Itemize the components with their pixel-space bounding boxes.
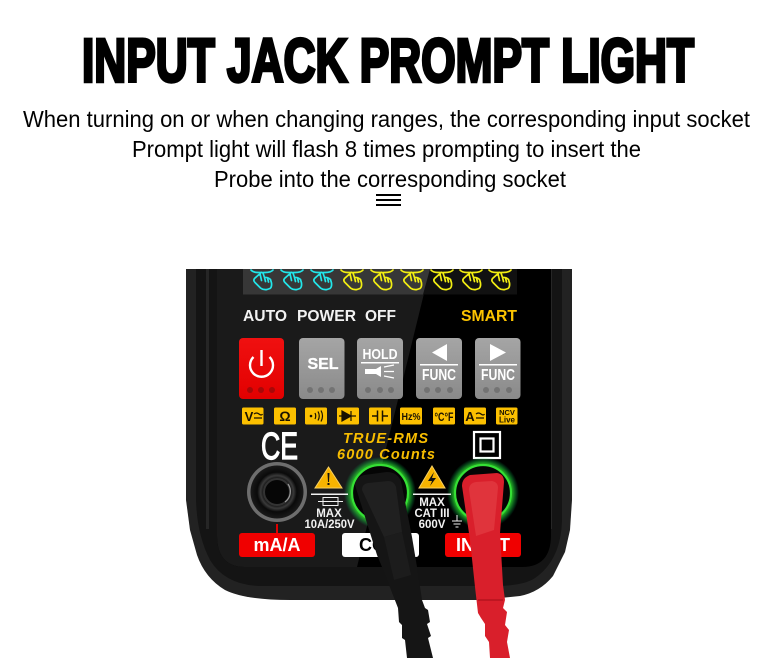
function icon row: Live	[499, 416, 516, 424]
red probe	[462, 473, 510, 658]
CAT III rating: CAT III	[414, 508, 450, 520]
COM label	[342, 533, 419, 557]
function icon row: Hz%	[402, 411, 421, 423]
function icon row: °C°F	[434, 412, 454, 424]
FUNC left button	[416, 338, 462, 399]
CAT III rating: MAX	[419, 497, 445, 509]
mA/A jack	[247, 462, 307, 534]
function icon row	[242, 408, 518, 424]
HOLD button: HOLD	[362, 346, 398, 363]
true-rms text	[337, 431, 435, 463]
INPUT jack green light	[447, 457, 519, 529]
high voltage triangle	[419, 466, 445, 488]
auto power off label: OFF	[365, 308, 396, 325]
CAT III rating	[413, 494, 462, 531]
auto power off label	[243, 308, 396, 325]
CE mark: CE	[261, 426, 298, 468]
mA/A label: mA/A	[253, 535, 301, 555]
meter face panel	[217, 269, 551, 567]
multimeter	[186, 269, 572, 658]
description text	[23, 106, 751, 192]
fuse rating	[304, 494, 355, 531]
function icon row: NCV	[499, 408, 515, 417]
icon: menu lines	[376, 194, 401, 206]
function icon row: A	[465, 409, 475, 424]
INPUT label	[445, 533, 521, 557]
true-rms text: TRUE-RMS	[343, 431, 428, 447]
fuse rating: 10A/250V	[304, 519, 355, 531]
smart label: SMART	[461, 308, 517, 325]
description text: When turning on or when changing ranges, the corresponding input socket	[23, 106, 751, 132]
fuse rating: MAX	[316, 508, 342, 520]
FUNC right button	[475, 338, 520, 399]
FUNC right button: FUNC	[481, 367, 515, 384]
display window with range hand icons	[243, 269, 517, 294]
black probe	[355, 472, 433, 658]
power button	[239, 338, 284, 399]
description text: Probe into the corresponding socket	[214, 166, 567, 192]
SEL button	[299, 338, 344, 399]
description text: Prompt light will flash 8 times prompting to insert the	[132, 136, 641, 162]
warning triangle	[315, 467, 342, 488]
COM label: COM	[359, 535, 401, 555]
icon: double insulation square	[474, 432, 500, 458]
INPUT label: INPUT	[456, 535, 510, 555]
CAT III rating: 600V	[419, 519, 446, 531]
function icon row: Ω	[279, 408, 291, 424]
HOLD button	[357, 338, 403, 399]
auto power off label: POWER	[297, 308, 356, 325]
SEL button: SEL	[307, 356, 339, 373]
COM jack green light	[344, 457, 416, 529]
function icon row: V	[245, 409, 254, 424]
mA/A label	[239, 533, 315, 557]
FUNC left button: FUNC	[422, 367, 456, 384]
auto power off label: AUTO	[243, 308, 287, 325]
meter rubber casing	[186, 269, 572, 600]
true-rms text: 6000 Counts	[337, 447, 435, 463]
